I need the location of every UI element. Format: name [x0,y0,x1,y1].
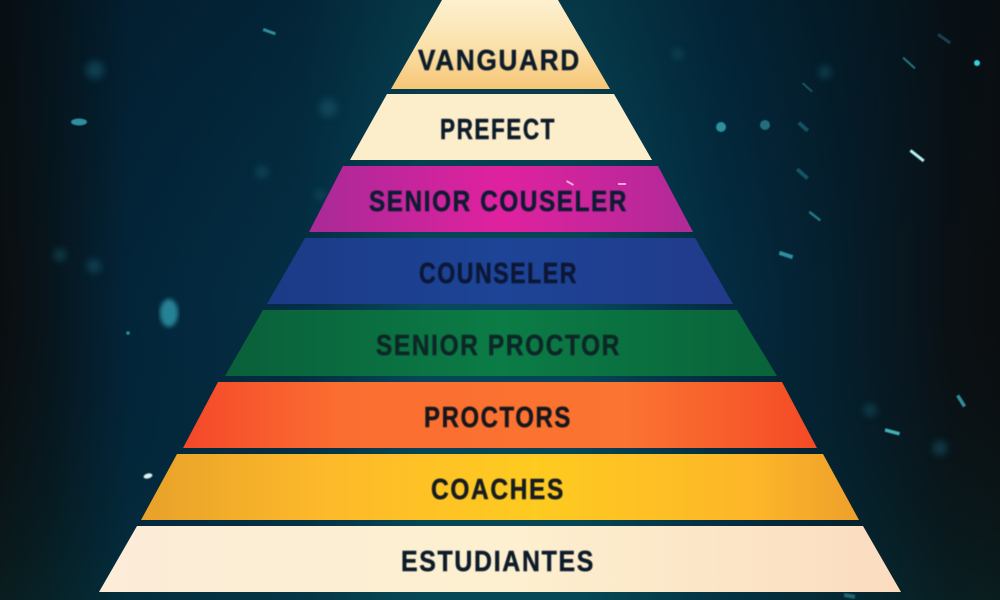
tier: senior proctor [225,310,777,376]
tier: proctors [183,382,817,448]
tier: prefect: PREFECT [440,114,556,146]
tier: coaches [141,454,859,520]
tier: vanguard [391,0,610,89]
tier: estudiantes [99,526,901,592]
tier: estudiantes: ESTUDIANTES [401,546,595,578]
tier: senior proctor: SENIOR PROCTOR [376,330,621,362]
tier: senior counseler [309,166,693,232]
tier: counselor: COUNSELER [419,258,578,290]
tier: counselor [267,238,733,304]
tier: coaches: COACHES [431,474,565,506]
tier: vanguard: VANGUARD [418,45,581,77]
pyramid [99,0,901,592]
tier: prefect [350,94,652,160]
tier: proctors: PROCTORS [424,402,572,434]
tier: senior counseler: SENIOR COUSELER [369,186,628,218]
